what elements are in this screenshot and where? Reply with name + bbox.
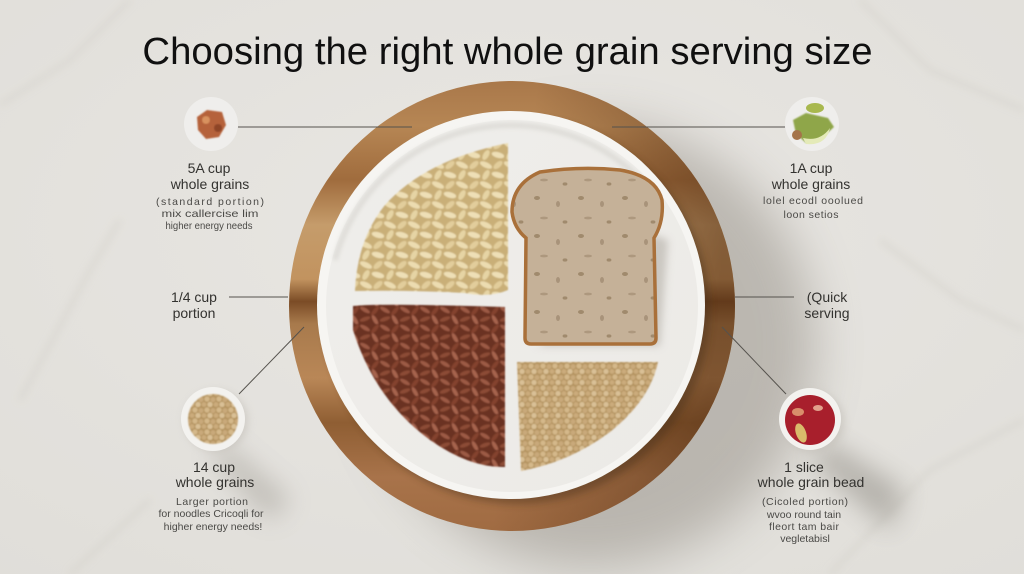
text: top left bbox=[156, 160, 264, 232]
portion: red rice bbox=[353, 305, 505, 467]
text: top left: whole grains bbox=[170, 176, 249, 192]
text: middle right bbox=[804, 289, 850, 321]
text: bottom right bbox=[757, 459, 864, 545]
text: bottom right: whole grain bead bbox=[757, 474, 864, 490]
text: top right: loon setios bbox=[784, 209, 838, 221]
text: top right: whole grains bbox=[771, 176, 850, 192]
icon: bowl of grains bbox=[181, 387, 248, 452]
text: bottom right: vegletabisl bbox=[780, 533, 830, 545]
text: bottom left: for noodles Cricoqli for bbox=[158, 508, 264, 520]
text: middle left: portion bbox=[173, 305, 215, 321]
text: bottom right: wvoo round tain bbox=[766, 509, 841, 521]
text: bottom left: 14 cup bbox=[193, 459, 235, 475]
icon: grain cluster bbox=[184, 97, 238, 151]
icon: bowl with apple bbox=[779, 388, 845, 453]
text: bottom right: (Cicoled portion) bbox=[762, 496, 848, 508]
text: middle left: 1/4 cup bbox=[171, 289, 217, 305]
text: top right: lolel ecodl ooolued bbox=[763, 195, 863, 207]
title: Choosing the right whole grain serving size bbox=[142, 30, 873, 73]
connector lines bbox=[229, 127, 794, 394]
bread slice bbox=[512, 168, 668, 346]
text: top left: mix callercise lim bbox=[162, 208, 259, 220]
text: bottom right: fleort tam bair bbox=[769, 521, 840, 533]
text: bottom left: higher energy needs! bbox=[164, 521, 262, 533]
text: top left: higher energy needs bbox=[166, 220, 252, 232]
text: middle right: (Quick bbox=[807, 289, 848, 305]
text: bottom left bbox=[158, 459, 264, 533]
text: top left: (standard portion) bbox=[156, 196, 264, 208]
text: middle left bbox=[171, 289, 217, 321]
text: top left: 5A cup bbox=[188, 160, 231, 176]
text: bottom left: Larger portion bbox=[176, 496, 248, 508]
text: top right: 1A cup bbox=[790, 160, 833, 176]
wooden board bbox=[289, 81, 735, 531]
text: top right bbox=[763, 160, 863, 221]
icon: green vegetables bbox=[785, 97, 839, 151]
text: bottom left: whole grains bbox=[175, 474, 254, 490]
text: bottom right: 1 slice bbox=[784, 459, 824, 475]
portion: light whole grains bbox=[355, 143, 508, 295]
plate bbox=[317, 111, 710, 504]
text: middle right: serving bbox=[804, 305, 850, 321]
portion: oat grains bbox=[517, 362, 658, 471]
